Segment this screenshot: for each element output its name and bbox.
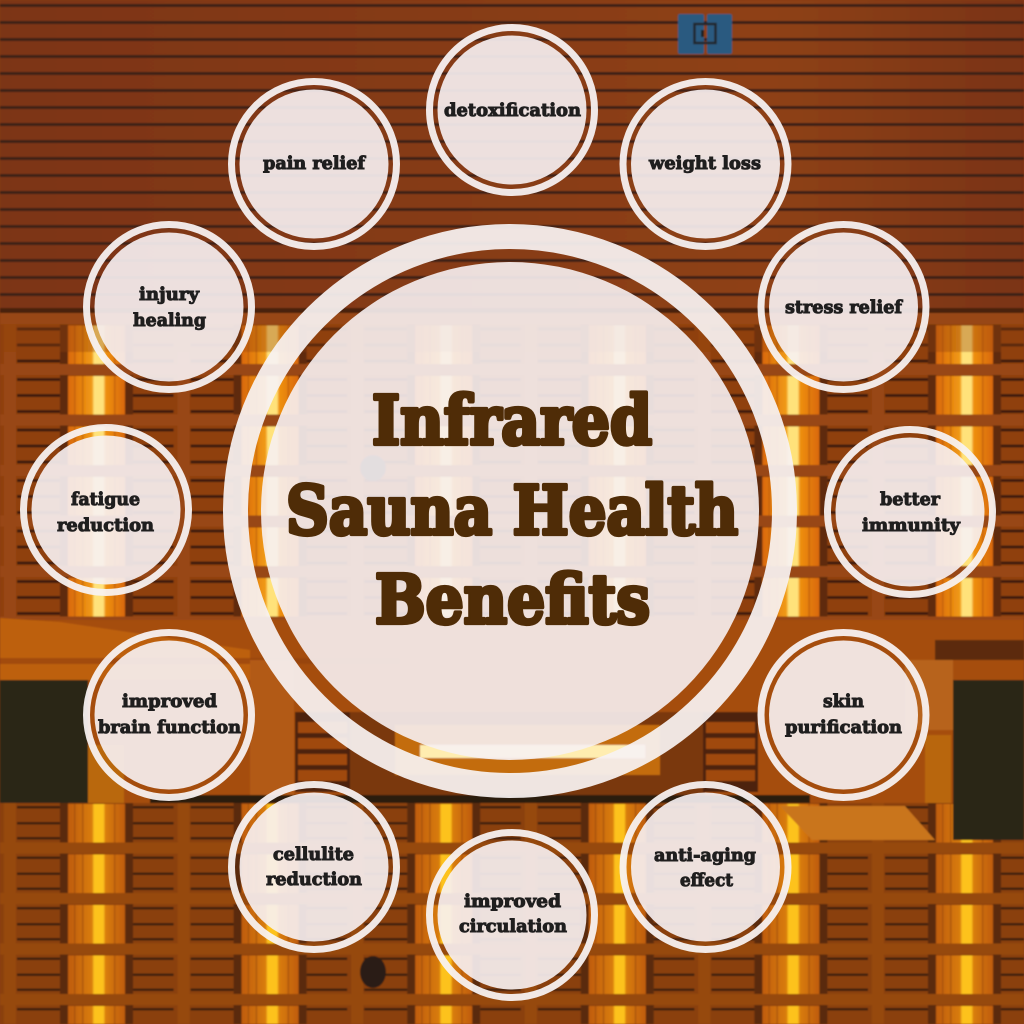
benefit: stress relief xyxy=(761,224,926,390)
inner disk xyxy=(261,262,759,760)
centre circle xyxy=(236,236,784,786)
title: Benefits xyxy=(375,560,650,639)
wall vents xyxy=(360,455,386,988)
benefit: better immunity: better xyxy=(880,489,940,510)
benefit: improved circulation: circulation xyxy=(459,916,567,937)
benefit: anti-aging effect xyxy=(623,784,788,950)
upper wall with horizontal slats xyxy=(0,0,1024,324)
glowing wall panels, upper row xyxy=(0,324,1024,620)
middle section with benches and doors xyxy=(0,618,1024,840)
benefit: injury healing xyxy=(86,224,252,390)
benefit: detoxification: detoxification xyxy=(444,100,581,121)
benefit: improved brain function: improved xyxy=(122,691,217,712)
benefit: pain relief: pain relief xyxy=(263,153,366,174)
benefit: cellulite reduction: reduction xyxy=(266,869,362,890)
benefit: pain relief xyxy=(232,82,396,246)
benefit: weight loss xyxy=(623,82,788,246)
right door lower edge xyxy=(953,800,1024,840)
title: Sauna Health xyxy=(286,471,738,550)
benefit: improved circulation xyxy=(430,832,594,998)
benefit: anti-aging effect: effect xyxy=(680,870,734,891)
icon: blue wall control box xyxy=(678,14,732,54)
benefit: detoxification xyxy=(430,28,594,192)
benefit: injury healing: healing xyxy=(133,310,206,331)
benefit: injury healing: injury xyxy=(139,284,200,305)
benefit: better immunity xyxy=(828,430,992,594)
benefit: fatigue reduction: fatigue xyxy=(71,489,140,510)
benefit: skin purification: purification xyxy=(785,717,902,738)
benefit: skin purification xyxy=(761,632,926,798)
benefit: improved brain function xyxy=(86,632,252,798)
benefit: skin purification: skin xyxy=(823,691,864,712)
benefit: fatigue reduction: reduction xyxy=(57,515,154,536)
benefit: stress relief: stress relief xyxy=(785,297,903,318)
benefit: weight loss: weight loss xyxy=(648,153,761,174)
benefit: cellulite reduction xyxy=(232,784,396,950)
title: Infrared xyxy=(372,381,652,460)
outer ring xyxy=(236,236,784,786)
benefit: anti-aging effect: anti-aging xyxy=(654,845,756,866)
sauna bench xyxy=(780,806,935,840)
benefit: improved circulation: improved xyxy=(464,891,561,912)
benefit: fatigue reduction xyxy=(24,428,188,592)
benefit: improved brain function: brain function xyxy=(98,717,241,738)
glowing wall panels, lower row xyxy=(0,803,1024,1024)
title xyxy=(286,381,738,639)
benefit: better immunity: immunity xyxy=(862,515,961,536)
benefit: cellulite reduction: cellulite xyxy=(273,844,354,865)
